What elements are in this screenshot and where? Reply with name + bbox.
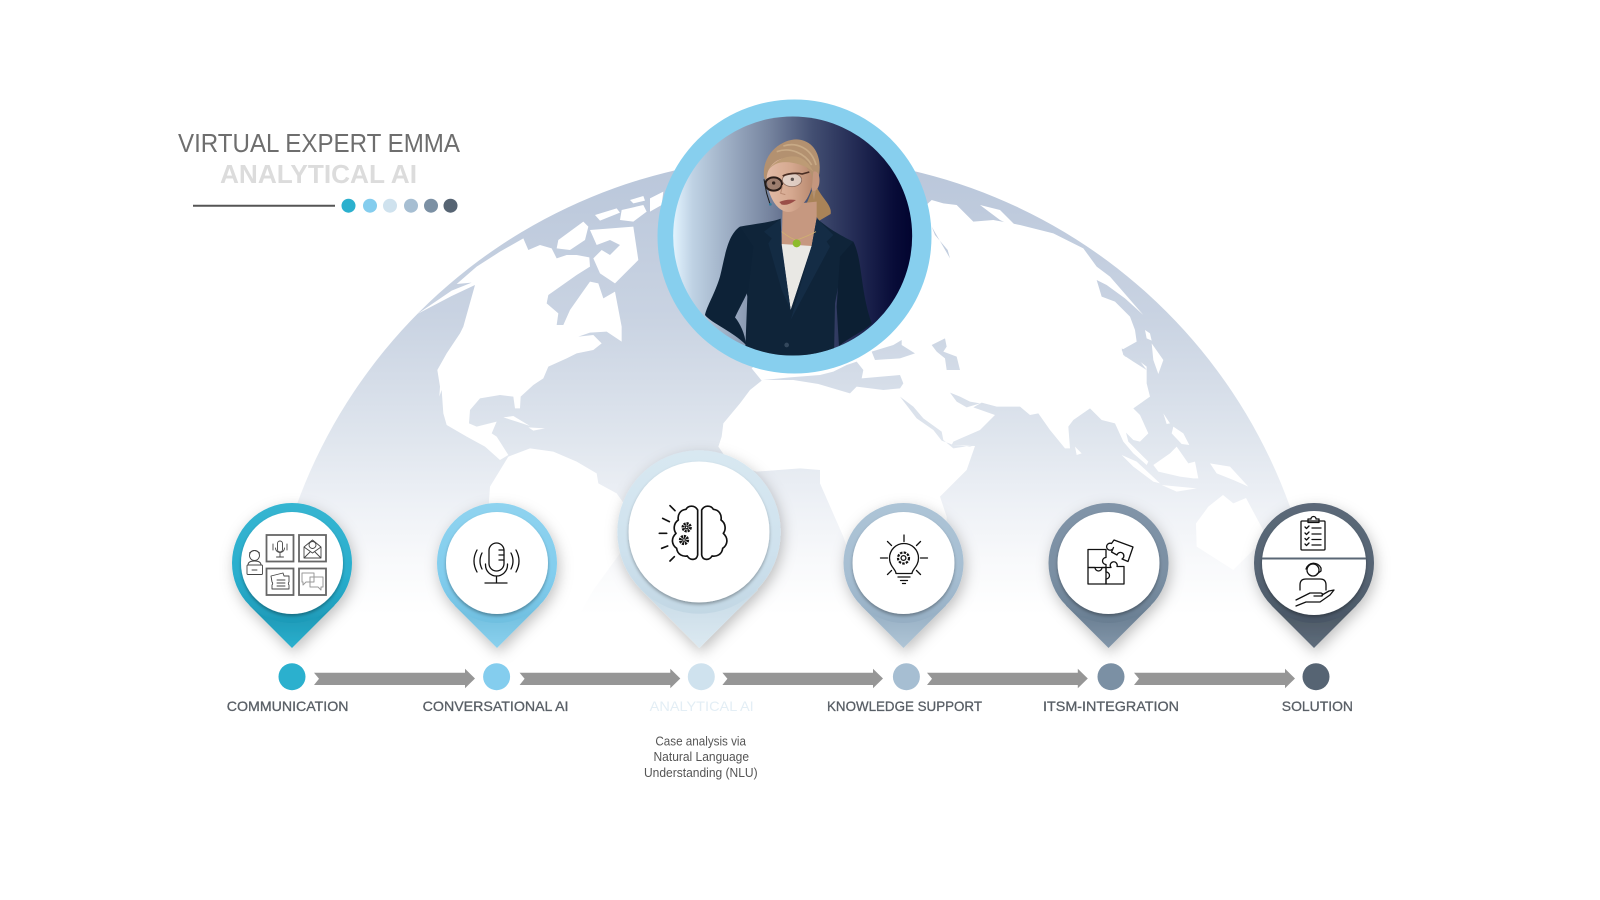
- title: virtual expert emma: VIRTUAL EXPERT EMMA: [178, 128, 461, 158]
- portrait ring: [658, 100, 932, 374]
- pin body: [1048, 503, 1168, 648]
- pin body: [617, 450, 781, 648]
- stage labels: ANALYTICAL AI: [650, 698, 754, 714]
- pin: knowledge support: [844, 503, 964, 648]
- description: analytical ai: [644, 735, 758, 780]
- pin body: [844, 503, 964, 648]
- pin: analytical ai: [617, 450, 781, 648]
- portrait figure: [670, 113, 917, 360]
- icon: puzzle pieces: [1088, 540, 1133, 584]
- portrait: virtual expert emma: [658, 100, 932, 374]
- stage labels: KNOWLEDGE SUPPORT: [827, 698, 982, 714]
- legend dots: [342, 199, 458, 213]
- description: analytical ai: Understanding (NLU): [644, 766, 758, 780]
- stage labels: COMMUNICATION: [227, 698, 348, 714]
- americas: [418, 192, 664, 554]
- pin face: [1262, 511, 1366, 615]
- pin body: [437, 503, 557, 648]
- title block: [178, 128, 461, 213]
- pin face: [1058, 512, 1160, 614]
- subtitle: analytical ai: ANALYTICAL AI: [220, 159, 417, 189]
- icon: microphone: [474, 543, 519, 583]
- stage labels: SOLUTION: [1282, 698, 1353, 714]
- description: analytical ai: Natural Language: [654, 750, 749, 764]
- pin body: [1254, 503, 1374, 648]
- pin: conversational ai: [437, 503, 557, 648]
- pin divider: [1262, 558, 1366, 560]
- pin: solution: [1254, 503, 1374, 648]
- stage labels: [227, 698, 1353, 714]
- eurasia, africa and oceania: [718, 200, 1264, 554]
- pin body: [232, 503, 352, 648]
- icon: checklist clipboard: [1301, 516, 1325, 550]
- pin face: [241, 512, 343, 614]
- title rule: [193, 205, 335, 207]
- timeline arrows: [314, 669, 1295, 688]
- icon: agent in hand: [1296, 563, 1334, 606]
- infographic canvas: [178, 100, 1383, 780]
- stage labels: ITSM-INTEGRATION: [1043, 698, 1179, 714]
- inland seas: [763, 227, 1147, 448]
- timeline dots: [278, 663, 1330, 690]
- world globe background: [298, 170, 1290, 554]
- icon: light bulb with gear: [880, 535, 928, 584]
- pin face: [446, 512, 548, 614]
- icon: brain with gears: [659, 506, 727, 561]
- pin face: [852, 512, 954, 614]
- icon: communication channels: [247, 535, 326, 595]
- stage labels: CONVERSATIONAL AI: [423, 698, 568, 714]
- pin face: [628, 462, 770, 602]
- pin: itsm-integration: [1048, 503, 1168, 648]
- pin: communication: [232, 503, 352, 648]
- description: analytical ai: Case analysis via: [655, 735, 746, 749]
